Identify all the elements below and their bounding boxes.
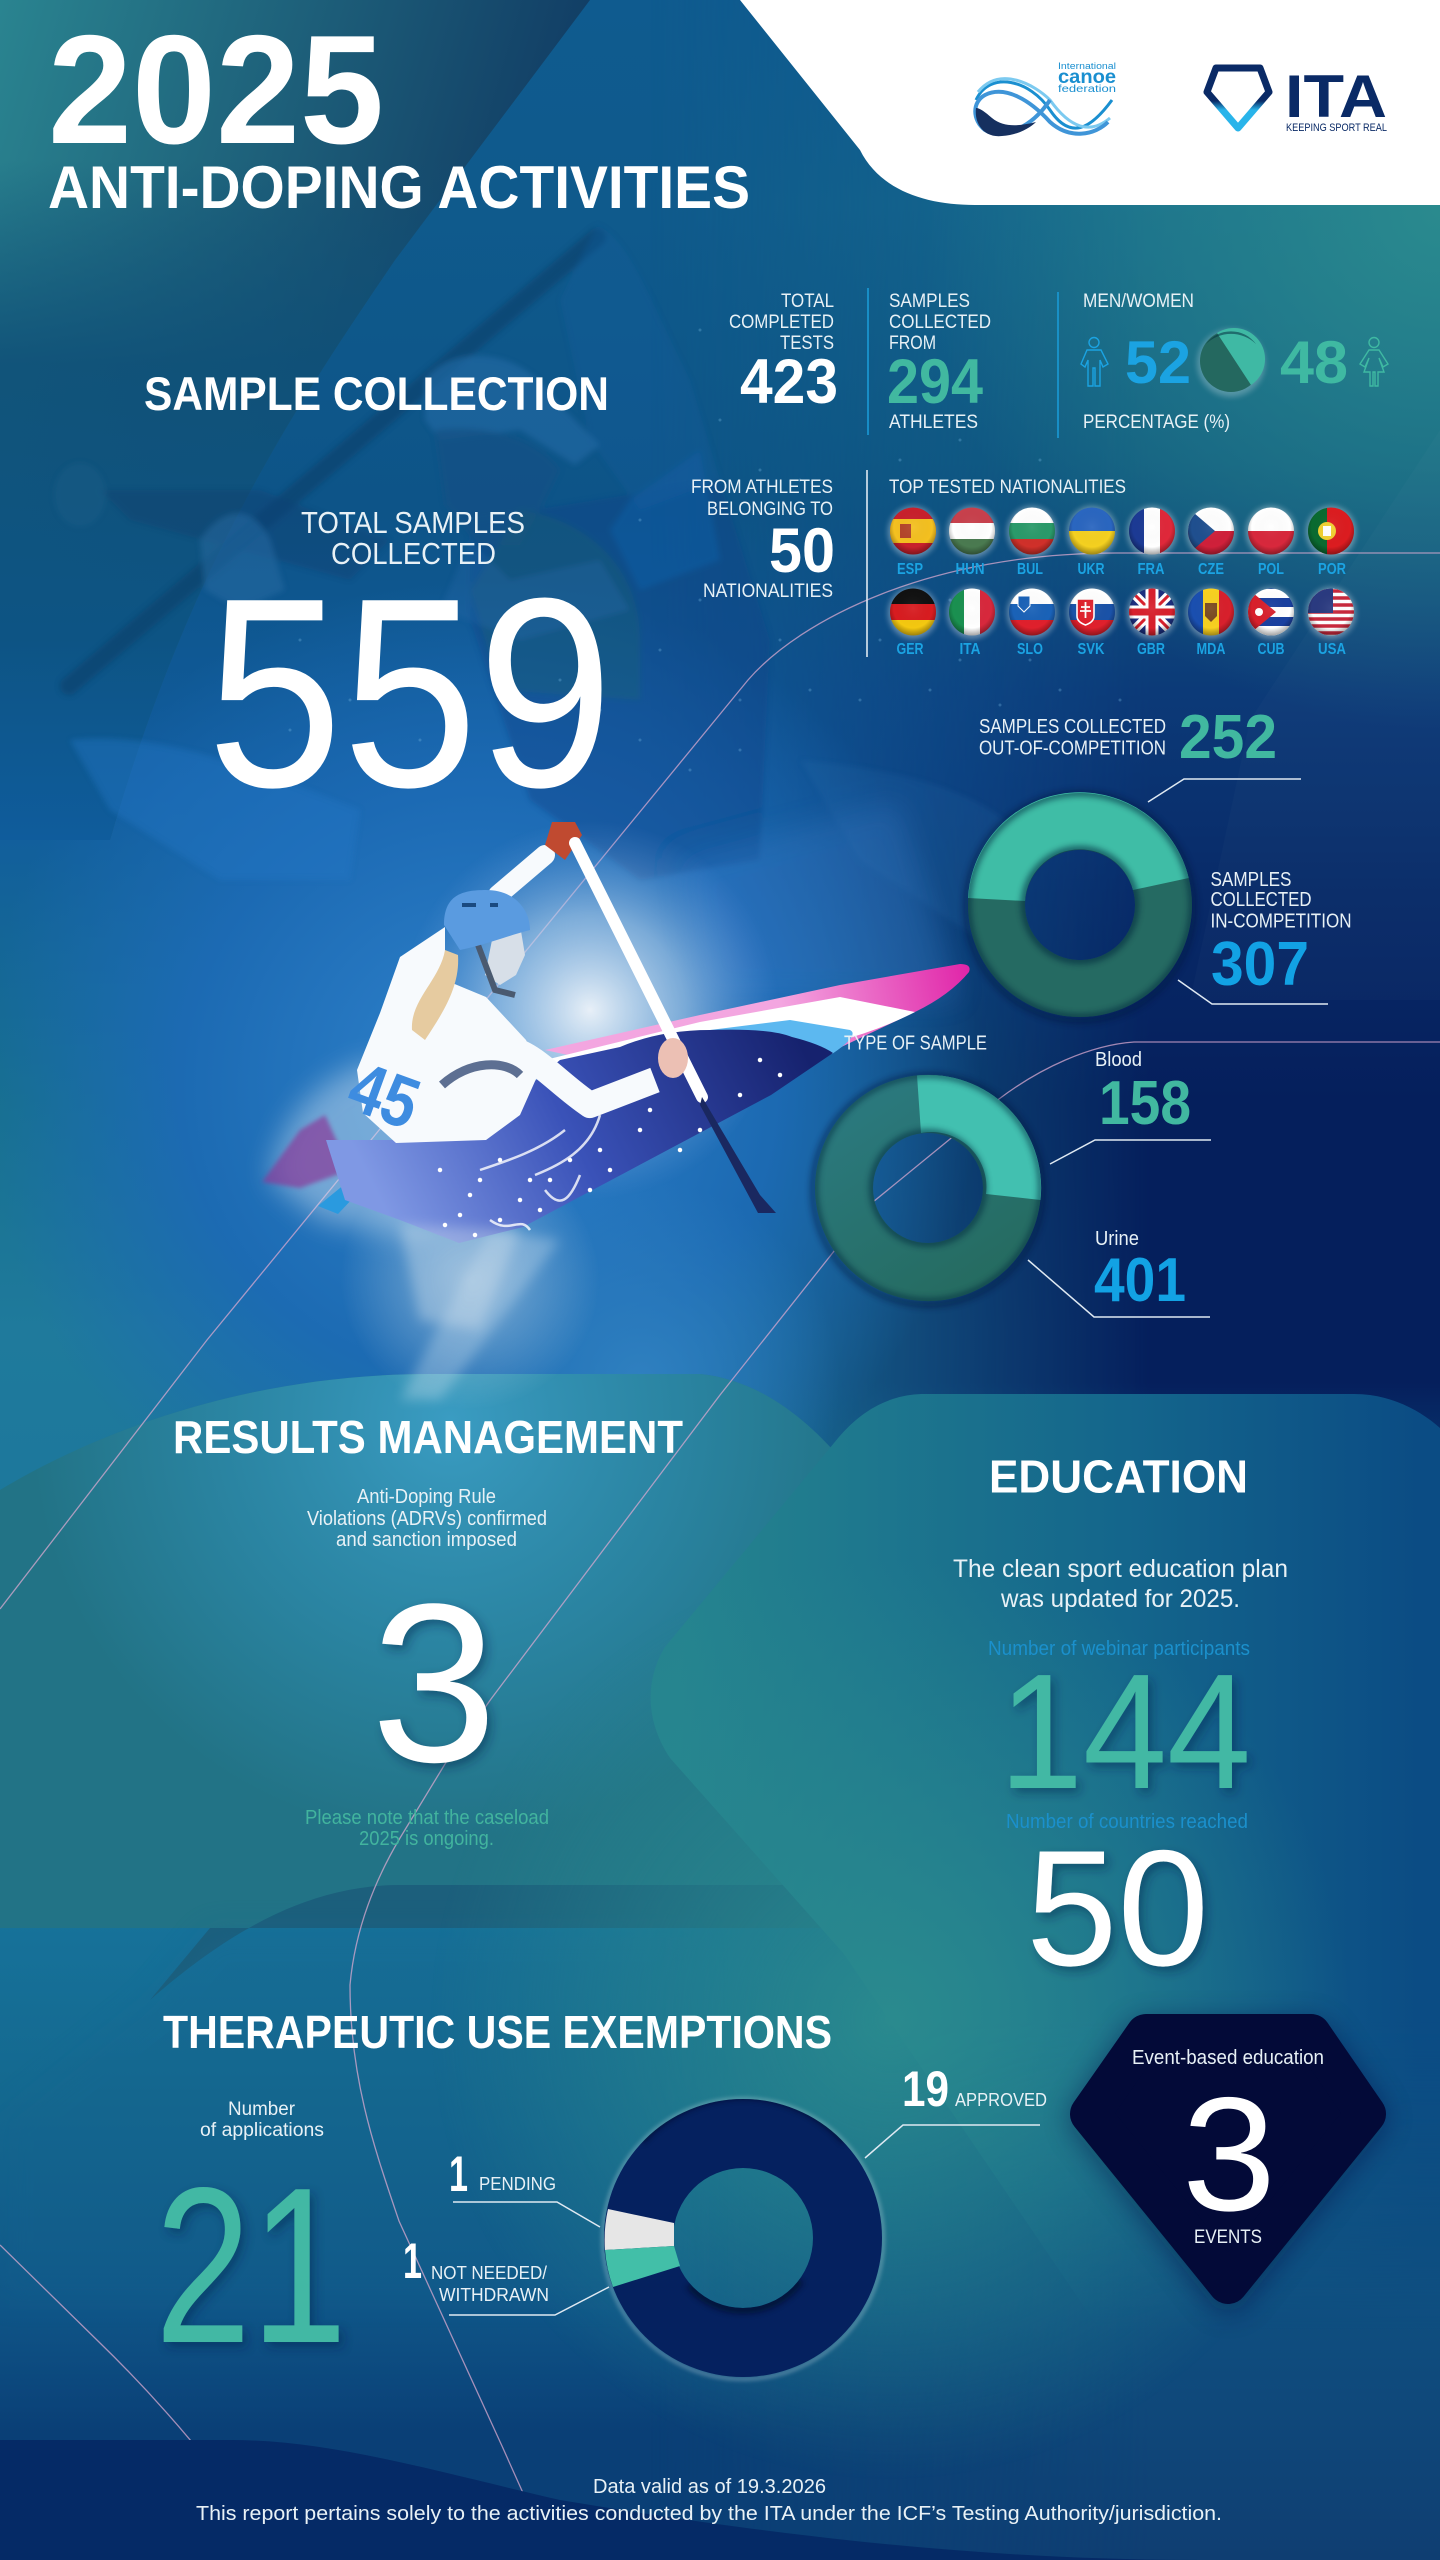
chart: gender pie bbox=[1197, 328, 1265, 397]
section: education: Number of countries reached bbox=[1006, 1811, 1248, 1833]
label: in-competition: IN-COMPETITION bbox=[1210, 910, 1352, 932]
flag: UKR bbox=[1068, 507, 1116, 555]
water spray below hull bbox=[400, 1225, 520, 1330]
section: results management: RESULTS MANAGEMENT bbox=[173, 1411, 683, 1463]
nationality codes: ESP bbox=[897, 561, 923, 578]
illustration: kayaker bbox=[262, 820, 970, 1410]
label: blood: 158 bbox=[1099, 1069, 1191, 1138]
footer note: This report pertains solely to the activities conducted by the ITA under the ICF’s Testing Authority/jurisdiction. bbox=[196, 2503, 1222, 2525]
label: approved bbox=[865, 2061, 1047, 2158]
stat: samples collected from athletes: SAMPLES bbox=[889, 291, 970, 312]
chart: TUE donut bbox=[603, 2094, 883, 2379]
segment: out-of-competition bbox=[968, 792, 1189, 901]
stars texture bbox=[260, 330, 1120, 770]
lower hand bbox=[658, 1038, 688, 1078]
section: education: 50 bbox=[1026, 1816, 1209, 2000]
panel: top tested nationalities bbox=[888, 477, 1356, 658]
footer band bbox=[0, 2440, 1200, 2560]
label: urine: 401 bbox=[1094, 1246, 1186, 1315]
label: in-competition bbox=[1178, 869, 1352, 1004]
label: in-competition: COLLECTED bbox=[1210, 889, 1312, 911]
stat: men and women percentage: MEN/WOMEN bbox=[1083, 291, 1194, 312]
section: education: was updated for 2025. bbox=[1000, 1585, 1240, 1613]
flag: SVK bbox=[1068, 588, 1116, 636]
kayak deck bbox=[545, 964, 970, 1062]
nationality codes: SLO bbox=[1017, 641, 1043, 658]
stat: men and women percentage bbox=[1081, 291, 1388, 433]
flag: ITA bbox=[948, 588, 996, 636]
logo: ITA: ITA bbox=[1285, 63, 1387, 130]
white logo corner bbox=[740, 0, 1440, 205]
nationality codes: HUN bbox=[956, 561, 984, 578]
panel: event-based education: Event-based education bbox=[1132, 2047, 1324, 2069]
logo: International Canoe Federation: canoe bbox=[1058, 67, 1116, 88]
teal glow under education bbox=[430, 1560, 1350, 2480]
nationality codes: FRA bbox=[1138, 561, 1165, 578]
heading: sample collection: SAMPLE COLLECTION bbox=[144, 367, 609, 420]
title bbox=[48, 3, 750, 221]
flag: GBR bbox=[1128, 588, 1176, 636]
stat: samples collected from athletes bbox=[887, 291, 991, 433]
section: results management: Violations (ADRVs) confirmed bbox=[307, 1508, 547, 1530]
bib number: 45 bbox=[338, 1047, 430, 1145]
logo: International Canoe Federation: International bbox=[1058, 61, 1116, 71]
nationality codes: POR bbox=[1318, 561, 1346, 578]
logo: ITA: KEEPING SPORT REAL bbox=[1286, 122, 1387, 134]
nationality codes: BUL bbox=[1017, 561, 1043, 578]
stat: nationalities: BELONGING TO bbox=[707, 499, 833, 520]
stat: number of applications: of applications bbox=[200, 2120, 324, 2141]
torso bbox=[357, 927, 540, 1143]
label: not needed / withdrawn: NOT NEEDED/ bbox=[431, 2263, 547, 2283]
nationality codes: POL bbox=[1258, 561, 1284, 578]
total samples number: 559 bbox=[207, 543, 613, 844]
nationality codes: ITA bbox=[960, 641, 981, 658]
upper arm bbox=[498, 855, 545, 895]
section: education: EDUCATION bbox=[989, 1450, 1248, 1502]
chart: in/out of competition donut bbox=[966, 792, 1194, 1021]
panel: education background bbox=[651, 1394, 1440, 2128]
label: blood bbox=[1050, 1049, 1211, 1164]
label: not needed / withdrawn: 1 bbox=[403, 2233, 422, 2289]
panel: top tested nationalities: TOP TESTED NATIONALITIES bbox=[889, 477, 1126, 498]
nationality codes: UKR bbox=[1078, 561, 1105, 578]
decorative curve lines bbox=[0, 553, 1440, 2560]
flag: CUB bbox=[1247, 588, 1295, 636]
label: out-of-competition bbox=[979, 703, 1301, 802]
hair bbox=[412, 950, 458, 1040]
section: results management: 2025 is ongoing. bbox=[359, 1828, 494, 1850]
segment: blood bbox=[917, 1075, 1041, 1200]
stat: nationalities: 50 bbox=[769, 516, 835, 586]
logo: ITA bbox=[1207, 63, 1387, 134]
stat: men and women percentage: 52 bbox=[1125, 329, 1191, 396]
label: not needed / withdrawn bbox=[403, 2233, 609, 2315]
panel: event-based education: EVENTS bbox=[1194, 2227, 1262, 2248]
label: pending bbox=[449, 2146, 600, 2227]
kayak hull bbox=[326, 1030, 833, 1243]
stat: total completed tests bbox=[729, 291, 838, 417]
nationality codes: MDA bbox=[1196, 641, 1226, 658]
label: in-competition: SAMPLES bbox=[1210, 869, 1292, 891]
section: results management: Anti-Doping Rule bbox=[357, 1486, 496, 1508]
flag gloss bbox=[890, 508, 1354, 636]
flag: POR bbox=[1307, 507, 1355, 555]
title: 2025 bbox=[48, 3, 384, 176]
label: type of sample: TYPE OF SAMPLE bbox=[844, 1032, 987, 1054]
background: faded paddler photo bbox=[54, 225, 1040, 1000]
label: in-competition: 307 bbox=[1211, 930, 1309, 999]
logo: International Canoe Federation bbox=[975, 61, 1116, 136]
flag: FRA bbox=[1128, 507, 1176, 555]
stat: samples collected from athletes: ATHLETES bbox=[889, 412, 978, 433]
flag: SLO bbox=[1008, 588, 1056, 636]
stat: total completed tests: COMPLETED bbox=[729, 312, 834, 333]
helmet bbox=[444, 890, 530, 950]
label: pending: 1 bbox=[449, 2146, 468, 2202]
label: urine: Urine bbox=[1095, 1228, 1139, 1250]
label: approved: APPROVED bbox=[955, 2090, 1047, 2110]
section heading: therapeutic use exemptions: THERAPEUTIC USE EXEMPTIONS bbox=[163, 2006, 832, 2058]
section: education bbox=[953, 1450, 1288, 2000]
label: approved: 19 bbox=[902, 2061, 949, 2117]
stat: samples collected from athletes: COLLECTED bbox=[889, 312, 991, 333]
total samples label bbox=[301, 505, 525, 571]
chart: type of sample donut bbox=[813, 1075, 1043, 1305]
flag: POL bbox=[1247, 507, 1295, 555]
footer note: Data valid as of 19.3.2026 bbox=[593, 2476, 826, 2498]
icon: man bbox=[1081, 338, 1108, 386]
section: results management: 3 bbox=[371, 1556, 497, 1809]
section: results management: Please note that the caseload bbox=[305, 1807, 549, 1829]
label: not needed / withdrawn: WITHDRAWN bbox=[439, 2285, 549, 2305]
nationality codes: GBR bbox=[1137, 641, 1165, 658]
stat: total completed tests: TOTAL bbox=[781, 291, 834, 312]
total samples label: TOTAL SAMPLES bbox=[301, 505, 525, 540]
stat: number of applications: 21 bbox=[155, 2142, 347, 2390]
light ray and spray bbox=[400, 1230, 560, 1400]
flag: ESP bbox=[889, 507, 937, 555]
segment: pending bbox=[605, 2209, 674, 2250]
flag: HUN bbox=[948, 507, 996, 555]
nationality codes: CUB bbox=[1258, 641, 1284, 658]
panel: results background bbox=[0, 1374, 860, 2300]
water droplets bbox=[440, 1060, 780, 1235]
stat: men and women percentage: 48 bbox=[1280, 329, 1348, 396]
stat: total completed tests: 423 bbox=[740, 347, 838, 417]
label: out-of-competition: OUT-OF-COMPETITION bbox=[979, 738, 1166, 760]
section: results management bbox=[173, 1411, 683, 1850]
label: out-of-competition: SAMPLES COLLECTED bbox=[979, 716, 1166, 738]
stat: number of applications bbox=[155, 2099, 347, 2390]
label: pending: PENDING bbox=[479, 2174, 556, 2194]
flag: GER bbox=[889, 588, 937, 636]
stat: total completed tests: TESTS bbox=[780, 333, 834, 354]
label: out-of-competition: 252 bbox=[1179, 703, 1277, 772]
panel: event-based education bbox=[1090, 2034, 1366, 2292]
section: education: 144 bbox=[999, 1640, 1251, 1823]
flag: CZE bbox=[1187, 507, 1235, 555]
stat: number of applications: Number bbox=[228, 2099, 296, 2120]
lower arm bbox=[512, 1050, 655, 1105]
nationality codes: SVK bbox=[1078, 641, 1105, 658]
face bbox=[485, 925, 525, 985]
flag: BUL bbox=[1008, 507, 1056, 555]
section: education: Number of webinar participants bbox=[988, 1638, 1250, 1660]
section: education: The clean sport education plan bbox=[953, 1555, 1288, 1583]
flag: USA bbox=[1307, 588, 1355, 636]
stat: nationalities: NATIONALITIES bbox=[703, 581, 833, 602]
paddle bbox=[575, 843, 702, 1097]
footer note bbox=[196, 2476, 1222, 2525]
label: blood: Blood bbox=[1095, 1049, 1142, 1071]
icon: woman bbox=[1360, 338, 1388, 386]
stat: samples collected from athletes: FROM bbox=[889, 333, 936, 354]
nationality codes bbox=[896, 561, 1346, 658]
upper hand bbox=[545, 822, 582, 860]
nationality codes: GER bbox=[896, 641, 924, 658]
stat: nationalities: FROM ATHLETES bbox=[691, 477, 833, 498]
segment: not needed bbox=[605, 2246, 680, 2287]
panel: event-based education: 3 bbox=[1182, 2064, 1276, 2245]
stat: nationalities bbox=[691, 477, 835, 602]
stat: samples collected from athletes: 294 bbox=[887, 347, 983, 417]
title: ANTI-DOPING ACTIVITIES bbox=[48, 154, 750, 221]
flag glows bbox=[888, 506, 1356, 639]
nationality codes: CZE bbox=[1198, 561, 1224, 578]
label: urine bbox=[1028, 1228, 1210, 1317]
total samples label: COLLECTED bbox=[331, 536, 496, 571]
nationality codes: USA bbox=[1318, 641, 1346, 658]
logo: International Canoe Federation: federation bbox=[1058, 84, 1116, 95]
stat: men and women percentage: PERCENTAGE (%) bbox=[1083, 412, 1230, 433]
flag: MDA bbox=[1187, 588, 1235, 636]
section: results management: and sanction imposed bbox=[336, 1529, 517, 1551]
